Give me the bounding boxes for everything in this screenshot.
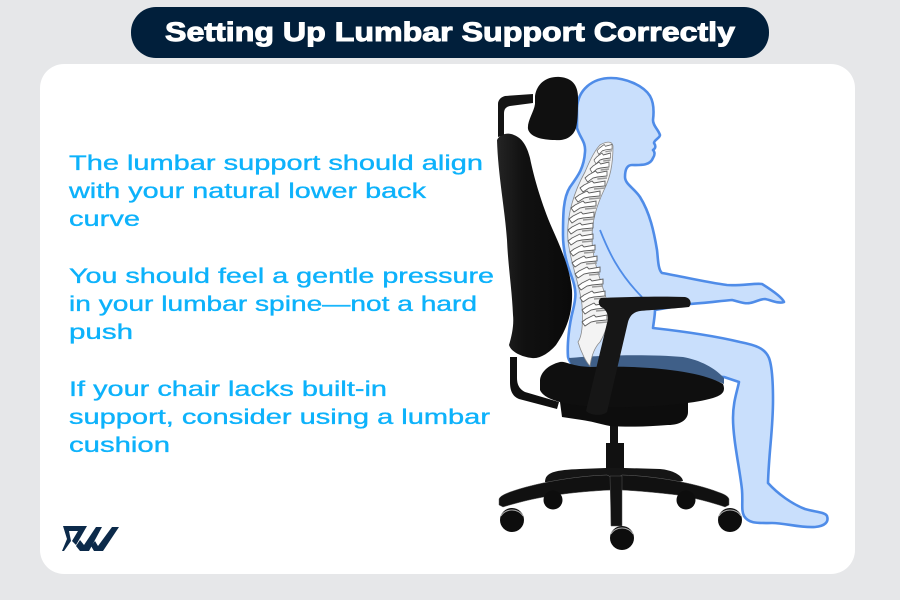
human body silhouette bbox=[563, 78, 828, 527]
text block: tips: with your natural lower back bbox=[68, 180, 427, 203]
headrest bracket bbox=[498, 94, 533, 137]
logo bbox=[62, 526, 119, 551]
illustration: seated body with spine and chair bbox=[497, 77, 828, 550]
text block: tips: support, consider using a lumbar bbox=[69, 406, 490, 429]
armrest bbox=[586, 297, 691, 415]
text block: tips: push bbox=[69, 321, 133, 344]
chair base bbox=[499, 424, 742, 550]
text block: tips: in your lumbar spine—not a hard bbox=[69, 293, 477, 316]
backrest support arm bbox=[510, 357, 559, 409]
text block: tips: You should feel a gentle pressure bbox=[69, 265, 494, 288]
text block: tips: curve bbox=[69, 208, 140, 231]
tip 1: The lumbar support should align bbox=[69, 152, 483, 175]
text block: tips bbox=[68, 152, 494, 457]
title banner: Setting Up Lumbar Support Correctly bbox=[165, 17, 735, 47]
backrest bbox=[497, 134, 572, 358]
headrest bbox=[528, 77, 578, 140]
spine bbox=[568, 142, 613, 366]
text block: tips: cushion bbox=[69, 434, 170, 457]
title banner bbox=[131, 7, 769, 58]
seat cushion and pan bbox=[540, 362, 724, 427]
seat seen through body bbox=[569, 355, 724, 384]
main white panel bbox=[40, 64, 855, 574]
inner arm line bbox=[600, 230, 642, 297]
text block: tips: If your chair lacks built-in bbox=[69, 378, 387, 401]
